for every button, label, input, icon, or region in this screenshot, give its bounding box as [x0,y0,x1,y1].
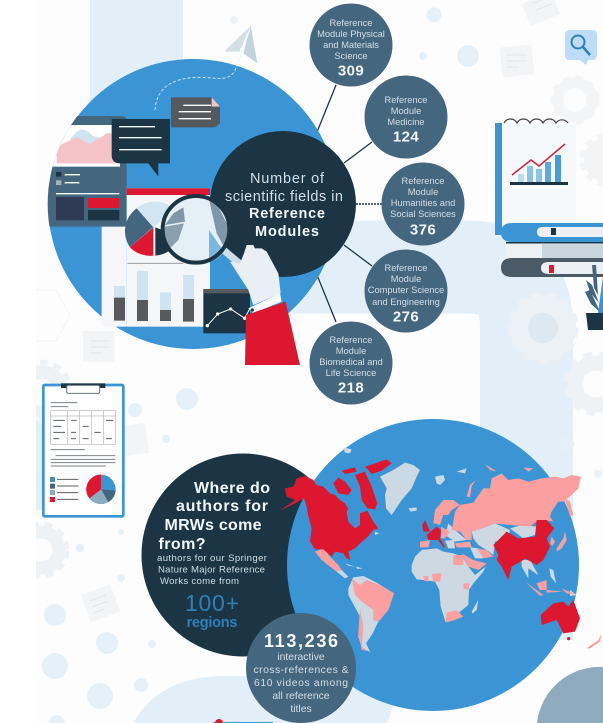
icon: note card [171,97,220,127]
stat: Physical and Materials Science: Reference [330,18,372,28]
stat: Physical and Materials Science [310,4,392,86]
icon: dashboard tablet [47,116,127,227]
panel: reference modules heading: Modules [255,224,319,240]
stat: cross-references and videos: titles [290,704,312,715]
panel: where do authors come from: Works come from [160,576,239,587]
stat: Biomedical and Life Science: Module [336,346,366,356]
icon: paper plane with dashed trail [155,26,257,110]
stat: Physical and Materials Science: 309 [338,62,364,80]
panel: where do authors come from: Nature Major Reference [158,564,265,576]
panel: where do authors come from: authors for our Springer [157,553,268,564]
stat: Humanities and Social Sciences: Module [408,187,438,197]
stat: Biomedical and Life Science: Reference [330,335,372,345]
panel: where do authors come from: authors for [176,498,268,515]
map: authors high regions [280,459,580,640]
stat: cross-references and videos [246,613,356,723]
stat: Computer Science and Engineering: Module [391,274,421,284]
stat: Computer Science and Engineering [364,250,448,332]
stat: Humanities and Social Sciences: Social Sciences [390,209,456,219]
stat: Biomedical and Life Science: Biomedical and [319,357,383,367]
decorative grey-blue circle [537,667,603,723]
panel: reference modules heading: Reference [249,206,325,222]
icon: notebook with rising chart [495,119,576,235]
stat: Biomedical and Life Science: 218 [338,380,364,396]
panel: illustration circle [48,59,338,349]
stat: Computer Science and Engineering: Computer Science [368,285,444,295]
stat: Biomedical and Life Science [310,322,392,404]
map: remaining regions [337,447,577,652]
stat: cross-references and videos: cross-references & [254,665,349,676]
stat: Medicine [364,76,448,158]
stat: Physical and Materials Science: Science [334,51,368,61]
icon: speech bubble [112,119,170,177]
stat: Humanities and Social Sciences: Reference [402,176,444,186]
icon: report page with charts [102,188,210,327]
stat: Humanities and Social Sciences [382,162,464,246]
icon: magnifying glass [163,196,245,268]
icon: search speech bubble [565,30,597,65]
panel: reference modules heading: scientific fields in [225,189,343,205]
panel: where do authors come from: 100+ [185,590,239,616]
stat: Computer Science and Engineering: Reference [385,263,427,273]
stat: Humanities and Social Sciences: Humanities and [391,198,455,208]
stat: Computer Science and Engineering: 276 [393,308,419,326]
map: authors medium regions [315,464,602,651]
stat: Biomedical and Life Science: Life Science [326,368,376,378]
stat: Humanities and Social Sciences: 376 [410,222,436,238]
stat: Medicine: 124 [393,128,419,146]
icon: potted plant [585,265,603,330]
stat: cross-references and videos: 113,236 [264,631,338,651]
panel: where do authors come from: MRWs come [164,517,262,534]
panel: where do authors come from: Where do [194,480,270,497]
icon: clipboard report [43,383,123,516]
stat: cross-references and videos: interactive [277,652,325,663]
stat: Computer Science and Engineering: and Engineering [372,297,440,307]
stat: Medicine: Reference [385,95,427,105]
bottom marker [213,719,273,723]
icon: line chart card [203,289,250,333]
stat: cross-references and videos: all reference [272,691,330,702]
panel: reference modules heading [210,131,356,277]
stat: Medicine: Module [391,106,421,116]
stat: Medicine: Medicine [387,117,425,127]
connector lines [315,85,382,322]
illustration: data analysis collage [47,97,300,365]
panel: where do authors come from: from? [158,536,206,553]
icon: hand in red sleeve [230,245,300,365]
stat: cross-references and videos: 610 videos among [254,678,348,689]
panel: reference modules heading: Number of [250,171,325,187]
panel: where do authors come from [142,454,344,656]
icon: stack of books [501,223,603,277]
world map [280,419,602,711]
stat: Physical and Materials Science: Module Physical [317,29,385,39]
panel: where do authors come from: regions [186,615,238,631]
stat: Physical and Materials Science: and Materials [323,40,379,50]
